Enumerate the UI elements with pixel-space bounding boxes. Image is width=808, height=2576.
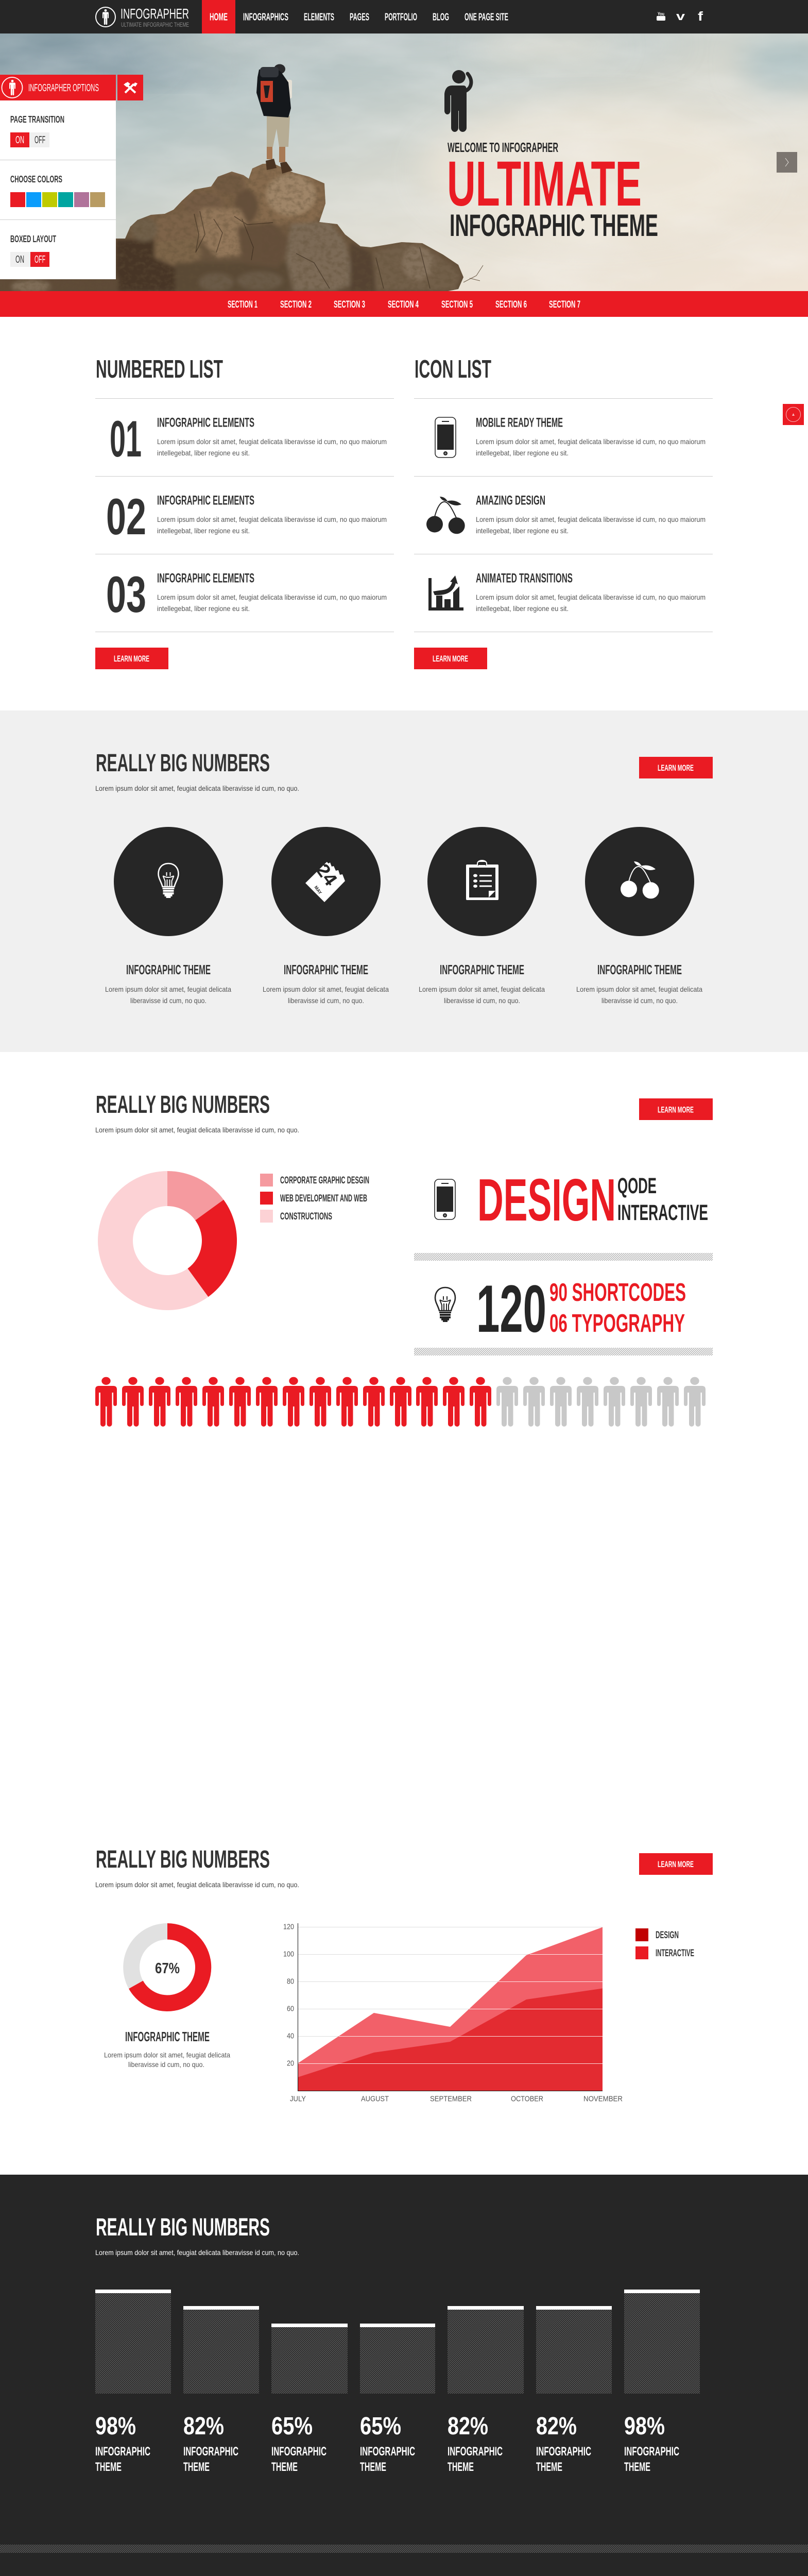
choose colors: [10, 174, 105, 207]
boxed layout: OFF: [35, 254, 45, 265]
donut legend: CORPORATE GRAPHIC DESGIN: [280, 1175, 369, 1186]
y axis labels: 60: [287, 2004, 294, 2013]
panel: numbered list: [95, 355, 394, 669]
panel: bars: [95, 2214, 700, 2474]
subheading: Lorem ipsum dolor sit amet, feugiat delicata liberavisse id cum, no quo.: [95, 1126, 299, 1134]
progress donut: 67%: [155, 1960, 180, 1977]
button: LEARN MORE: [658, 1859, 694, 1869]
item 02: INFOGRAPHIC ELEMENTS: [157, 494, 254, 508]
heading: NUMBERED LIST: [96, 355, 223, 383]
section bar: SECTION 4: [388, 299, 419, 310]
logo: ULTIMATE INFOGRAPHIC THEME: [121, 21, 189, 28]
heading: REALLY BIG NUMBERS: [96, 2214, 270, 2241]
infographic theme: INFOGRAPHIC THEME: [450, 208, 658, 243]
design stat: QODE: [617, 1174, 657, 1198]
bar 2: INFOGRAPHIC: [183, 2445, 238, 2459]
item: mobile: MOBILE READY THEME: [476, 415, 563, 430]
section bar: SECTION 6: [495, 299, 527, 310]
y axis labels: [283, 1923, 294, 2068]
x axis labels: OCTOBER: [511, 2095, 543, 2103]
item: calendar: INFOGRAPHIC THEME: [284, 962, 368, 977]
item 01: INFOGRAPHIC ELEMENTS: [157, 415, 254, 430]
item: mobile: intellegebat, liber regione eu sit.: [476, 449, 569, 457]
boxed layout: BOXED LAYOUT: [10, 234, 56, 244]
subheading: Lorem ipsum dolor sit amet, feugiat delicata liberavisse id cum, no quo.: [95, 1880, 299, 1889]
y axis labels: 40: [287, 2032, 294, 2040]
bar 6: 82%: [536, 2413, 577, 2440]
section bar: SECTION 2: [280, 299, 312, 310]
shortcodes stat: 90 SHORTCODES: [549, 1279, 686, 1307]
bar 3: THEME: [271, 2460, 298, 2474]
navigation: PAGES: [350, 11, 369, 23]
item: calendar: Lorem ipsum dolor sit amet, feugiat delicata: [263, 985, 389, 993]
bar 7: THEME: [624, 2460, 650, 2474]
item: design: [426, 494, 706, 535]
bar 1: 98%: [95, 2413, 136, 2440]
area chart legend: [635, 1928, 694, 1959]
social icons: [657, 9, 703, 24]
x axis labels: SEPTEMBER: [430, 2095, 472, 2103]
page transition: PAGE TRANSITION: [10, 114, 64, 125]
bar 1: INFOGRAPHIC: [95, 2445, 150, 2459]
y axis labels: 20: [287, 2059, 294, 2068]
donut caption: liberavisse id cum, no quo.: [128, 2060, 204, 2069]
item: bulb: INFOGRAPHIC THEME: [126, 962, 211, 977]
tools button: [117, 75, 143, 100]
section bar: SECTION 7: [549, 299, 580, 310]
options body: [0, 100, 116, 279]
bar 4: INFOGRAPHIC: [360, 2445, 415, 2459]
heading: REALLY BIG NUMBERS: [96, 1091, 270, 1118]
social icons: You: [658, 11, 664, 16]
hero photo: [0, 21, 808, 293]
sky: [0, 21, 808, 291]
item: cherry: liberavisse id cum, no quo.: [601, 996, 678, 1005]
y axis labels: 100: [283, 1950, 294, 1959]
item: calendar: [263, 827, 389, 1005]
boxed layout: ON: [15, 254, 24, 265]
x axis labels: JULY: [290, 2095, 306, 2103]
logo: [96, 6, 189, 28]
item 01: [110, 410, 387, 467]
item 02: intellegebat, liber regione eu sit.: [157, 527, 250, 535]
shortcodes stat: 120: [476, 1271, 546, 1346]
bar 6: [536, 2306, 612, 2474]
donut caption: [104, 2029, 230, 2069]
hero figure icon: [444, 70, 471, 132]
bar 7: 98%: [624, 2413, 665, 2440]
bar 6: THEME: [536, 2460, 562, 2474]
item 03: [106, 566, 387, 623]
bar 4: [360, 2324, 435, 2474]
donut chart: [98, 1171, 237, 1310]
item: bulb: liberavisse id cum, no quo.: [130, 996, 207, 1005]
navigation: HOME: [210, 11, 228, 23]
social icons: f: [698, 9, 703, 24]
panel: icon list: [414, 355, 713, 669]
shortcodes stat: [435, 1271, 686, 1346]
y axis labels: 120: [283, 1923, 294, 1931]
bar 4: THEME: [360, 2460, 386, 2474]
donut legend: [260, 1174, 369, 1223]
navigation: [210, 11, 508, 23]
people chart: red: [95, 1377, 491, 1427]
item: clipboard: Lorem ipsum dolor sit amet, feugiat delicata: [419, 985, 545, 993]
panel: options: [0, 75, 143, 279]
item: transitions: intellegebat, liber regione eu sit.: [476, 604, 569, 613]
options header: INFOGRAPHER OPTIONS: [28, 82, 99, 94]
panel: charts: [95, 1846, 713, 2103]
panel: circle icons: [0, 710, 808, 1052]
section bar: [0, 291, 808, 317]
navigation: BLOG: [433, 11, 449, 23]
item 03: 03: [106, 566, 146, 623]
welcome line: WELCOME TO INFOGRAPHER: [448, 140, 558, 155]
button: [639, 757, 713, 778]
section bar: SECTION 1: [228, 299, 257, 310]
area chart legend: INTERACTIVE: [656, 1948, 694, 1959]
design stat: INTERACTIVE: [617, 1200, 708, 1225]
donut caption: Lorem ipsum dolor sit amet, feugiat delicata: [104, 2050, 230, 2059]
active nav item: [202, 0, 235, 33]
x axis labels: AUGUST: [361, 2095, 389, 2103]
bar 2: THEME: [183, 2460, 210, 2474]
item: mobile: Lorem ipsum dolor sit amet, feugiat delicata liberavisse id cum, no quo maiorum: [476, 437, 706, 446]
ultimate: ULTIMATE: [447, 149, 642, 219]
section bar: SECTION 3: [334, 299, 365, 310]
subheading: Lorem ipsum dolor sit amet, feugiat delicata liberavisse id cum, no quo.: [95, 784, 299, 792]
item: clipboard: INFOGRAPHIC THEME: [440, 962, 524, 977]
navigation: INFOGRAPHICS: [243, 11, 288, 23]
button: [639, 1098, 713, 1120]
button: LEARN MORE: [658, 1105, 694, 1115]
item: design: intellegebat, liber regione eu sit.: [476, 527, 569, 535]
item: clipboard: [419, 827, 545, 1005]
dark page background: [0, 2175, 808, 2576]
hiker: [256, 64, 293, 174]
social icons: v: [676, 10, 685, 23]
bar 3: INFOGRAPHIC: [271, 2445, 326, 2459]
bar 3: 65%: [271, 2413, 313, 2440]
item: calendar: liberavisse id cum, no quo.: [288, 996, 364, 1005]
header bar: [0, 0, 808, 33]
item 02: Lorem ipsum dolor sit amet, feugiat delicata liberavisse id cum, no quo maiorum: [157, 515, 387, 523]
item: mobile: [435, 415, 706, 457]
bar 5: 82%: [448, 2413, 488, 2440]
bar 2: [183, 2306, 259, 2474]
bar 1: THEME: [95, 2460, 122, 2474]
item 02: 02: [106, 488, 146, 545]
x axis labels: NOVEMBER: [583, 2095, 623, 2103]
item: design: AMAZING DESIGN: [476, 494, 545, 508]
item 01: intellegebat, liber regione eu sit.: [157, 449, 250, 457]
bar 2: 82%: [183, 2413, 224, 2440]
back to top button: [783, 404, 804, 425]
area chart: [283, 1923, 623, 2103]
subheading: Lorem ipsum dolor sit amet, feugiat delicata liberavisse id cum, no quo.: [95, 2248, 299, 2257]
bar 6: INFOGRAPHIC: [536, 2445, 591, 2459]
button: LEARN MORE: [114, 654, 149, 664]
rock formation: [0, 160, 489, 293]
bar 5: THEME: [448, 2460, 474, 2474]
bar 1: [95, 2290, 171, 2474]
panel: big numbers: [95, 1091, 713, 1427]
navigation: ONE PAGE SITE: [465, 11, 508, 23]
bar 7: INFOGRAPHIC: [624, 2445, 679, 2459]
item: cherry: INFOGRAPHIC THEME: [597, 962, 682, 977]
item: cherry: Lorem ipsum dolor sit amet, feugiat delicata: [576, 985, 702, 993]
item: cherry: [576, 827, 702, 1005]
boxed layout: [10, 234, 56, 267]
donut legend: WEB DEVELOPMENT AND WEB: [280, 1193, 367, 1204]
item: bulb: Lorem ipsum dolor sit amet, feugiat delicata: [105, 985, 231, 993]
page transition: ON: [15, 134, 24, 146]
progress donut: [123, 1923, 211, 2011]
donut caption: INFOGRAPHIC THEME: [125, 2029, 210, 2044]
heading: REALLY BIG NUMBERS: [96, 750, 270, 777]
slider arrow: [777, 152, 797, 173]
button: [414, 648, 487, 669]
item 03: intellegebat, liber regione eu sit.: [157, 604, 250, 613]
item: calendar: MAY: [313, 885, 323, 895]
donut legend: CONSTRUCTIONS: [280, 1211, 332, 1222]
heading: ICON LIST: [415, 355, 491, 383]
bar 3: [271, 2324, 348, 2474]
item 03: Lorem ipsum dolor sit amet, feugiat delicata liberavisse id cum, no quo maiorum: [157, 593, 387, 601]
item 02: [106, 488, 387, 545]
logo: INFOGRAPHER: [121, 6, 189, 22]
page transition: [10, 114, 64, 147]
item: transitions: Lorem ipsum dolor sit amet, feugiat delicata liberavisse id cum, no quo maiorum: [476, 593, 706, 601]
item: transitions: ANIMATED TRANSITIONS: [476, 571, 573, 585]
hero headline: [447, 140, 658, 243]
navigation: PORTFOLIO: [385, 11, 417, 23]
bar 7: [624, 2290, 700, 2474]
area chart legend: DESIGN: [656, 1930, 679, 1941]
page transition: OFF: [35, 134, 45, 146]
shortcodes stat: 06 TYPOGRAPHY: [549, 1310, 685, 1337]
item: design: Lorem ipsum dolor sit amet, feugiat delicata liberavisse id cum, no quo maiorum: [476, 515, 706, 523]
section bar: SECTION 5: [441, 299, 473, 310]
bar 5: INFOGRAPHIC: [448, 2445, 503, 2459]
item: clipboard: liberavisse id cum, no quo.: [444, 996, 520, 1005]
bar 4: 65%: [360, 2413, 401, 2440]
button: LEARN MORE: [658, 763, 694, 773]
choose colors: CHOOSE COLORS: [10, 174, 62, 184]
x axis labels: [290, 2095, 623, 2103]
item 01: Lorem ipsum dolor sit amet, feugiat delicata liberavisse id cum, no quo maiorum: [157, 437, 387, 446]
item 03: INFOGRAPHIC ELEMENTS: [157, 571, 254, 585]
button: [95, 648, 168, 669]
item 01: 01: [110, 410, 142, 467]
item: bulb: [105, 827, 231, 1005]
button: LEARN MORE: [433, 654, 468, 664]
item: calendar: 24: [312, 860, 341, 890]
button: [639, 1853, 713, 1875]
people chart: grey: [496, 1377, 706, 1427]
heading: REALLY BIG NUMBERS: [96, 1846, 270, 1873]
item: transitions: [428, 571, 706, 613]
navigation: ELEMENTS: [304, 11, 334, 23]
bar 5: [448, 2306, 524, 2474]
options header: [0, 75, 116, 100]
y axis labels: 80: [287, 1977, 294, 1986]
design stat: DESIGN: [477, 1166, 616, 1233]
